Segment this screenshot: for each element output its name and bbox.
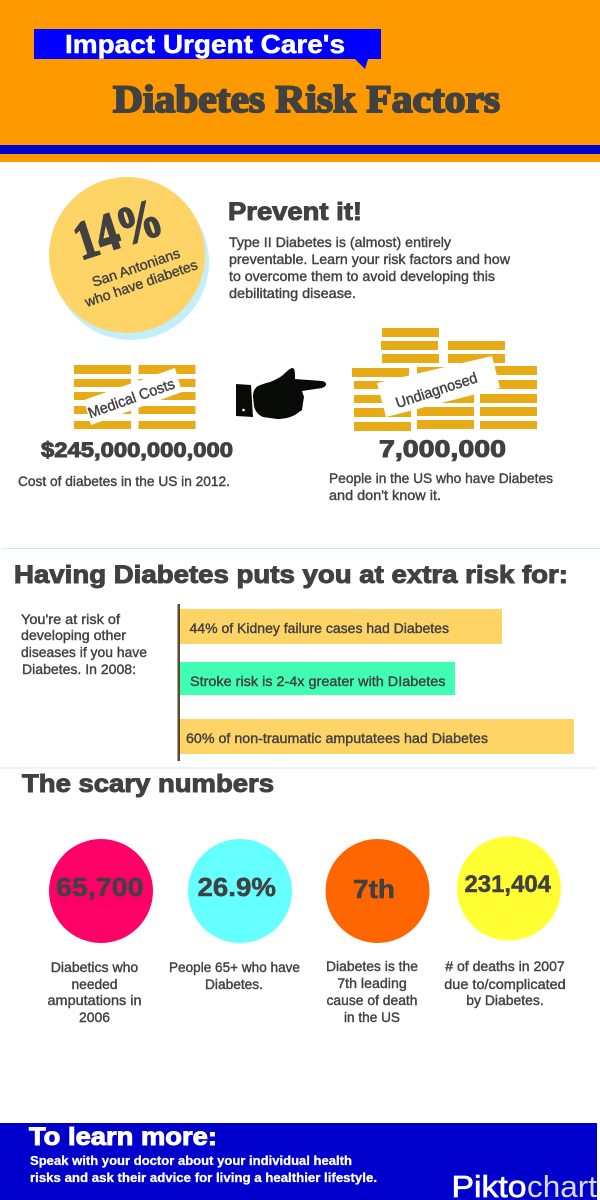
speech-bubble tag	[34, 29, 381, 69]
heading: Prevent it: Prevent it!	[228, 198, 362, 226]
speech-bubble tag: Impact Urgent Care's	[65, 29, 345, 59]
caption: 7th: Diabetes is the	[326, 958, 418, 974]
caption: deaths	[444, 958, 566, 1008]
stat: undiagnosed figure: 7,000,000	[379, 436, 506, 463]
caption: undiagnosed: People in the US who have Diabetes	[329, 470, 553, 486]
bar: kidney failure	[180, 609, 502, 644]
risk intro text	[21, 611, 147, 677]
caption: 7th: 7th leading	[337, 975, 407, 991]
stat circle: people 65+: 26.9%	[198, 872, 276, 902]
caption: people 65+	[169, 959, 300, 992]
caption: amputations: 2006	[79, 1009, 110, 1025]
icon: pointing hand	[236, 368, 326, 419]
intro paragraph: debilitating disease.	[229, 285, 356, 301]
caption: 7th: in the US	[344, 1009, 400, 1025]
chart axis	[178, 604, 180, 761]
stat: medical cost figure: $245,000,000,000	[41, 439, 233, 462]
risk intro text: You're at risk of	[21, 611, 120, 627]
caption: amputations: amputations in	[48, 992, 142, 1008]
bar chart: risks	[178, 604, 574, 761]
caption: deaths: by Diabetes.	[466, 992, 544, 1008]
caption: deaths: # of deaths in 2007	[445, 958, 565, 974]
stat circle: 14%: who have diabetes	[82, 256, 200, 310]
bar: stroke	[180, 662, 455, 695]
caption: amputations: Diabetics who	[51, 959, 138, 975]
bar: amputees	[180, 719, 574, 754]
icon: undiagnosed bill stack	[352, 328, 537, 431]
footer text: risks and ask their advice for living a healthier lifestyle.	[30, 1170, 377, 1185]
logo: Piktochart	[452, 1169, 597, 1200]
stat circle: 7th: 7th	[353, 874, 395, 904]
caption: people 65+: People 65+ who have	[169, 959, 300, 975]
caption: people 65+: Diabetes.	[205, 976, 263, 992]
caption: deaths: due to/complicated	[444, 976, 566, 992]
title: Diabetes Risk Factors	[113, 78, 500, 121]
caption: cost: Cost of diabetes in the US in 2012.	[18, 473, 230, 489]
stat circle: 14%	[49, 177, 209, 340]
footer heading: To learn more:	[29, 1123, 217, 1151]
heading: scary numbers: The scary numbers	[22, 770, 274, 798]
caption: amputations	[48, 959, 142, 1025]
icon: medical costs bill stack: Medical Costs	[86, 376, 177, 422]
stat circle: 7th	[326, 839, 430, 943]
icon: medical costs bill stack	[74, 365, 196, 429]
risk intro text: developing other	[21, 627, 126, 643]
footer text: Speak with your doctor about your individual health	[30, 1153, 352, 1168]
caption: 7th	[326, 958, 418, 1025]
heading: extra risk: Having Diabetes puts you at extra risk for:	[14, 561, 568, 589]
intro paragraph: to overcome them to avoid developing this	[229, 268, 495, 284]
footer text	[30, 1153, 377, 1185]
stat circle: deaths	[457, 836, 561, 940]
caption: undiagnosed	[329, 470, 553, 503]
intro paragraph: preventable. Learn your risk factors and how	[229, 251, 511, 267]
stat circle: 14%: 14%	[66, 187, 169, 271]
stat circle: people 65+	[188, 839, 292, 943]
intro paragraph	[229, 234, 511, 301]
stat circle: amputations	[49, 839, 153, 943]
bar: stroke: Stroke risk is 2-4x greater with DIabetes	[190, 673, 446, 689]
risk intro text: Diabetes. In 2008:	[22, 661, 136, 677]
bar: amputees: 60% of non-traumatic amputatees had Diabetes	[186, 730, 488, 746]
caption: undiagnosed: and don't know it.	[329, 487, 441, 503]
risk intro text: diseases if you have	[21, 644, 147, 660]
stat circle: amputations: 65,700	[56, 872, 144, 902]
stat circle: deaths: 231,404	[464, 871, 552, 898]
stat circle: 14%: San Antonians	[90, 245, 182, 290]
header banner	[0, 0, 600, 162]
caption: amputations: needed	[72, 976, 118, 992]
icon: undiagnosed bill stack: Undiagnosed	[394, 370, 480, 412]
bar: kidney failure: 44% of Kidney failure cases had Diabetes	[190, 620, 449, 636]
intro paragraph: Type II Diabetes is (almost) entirely	[229, 234, 451, 250]
footer panel	[0, 1123, 597, 1200]
caption: 7th: cause of death	[326, 992, 418, 1008]
